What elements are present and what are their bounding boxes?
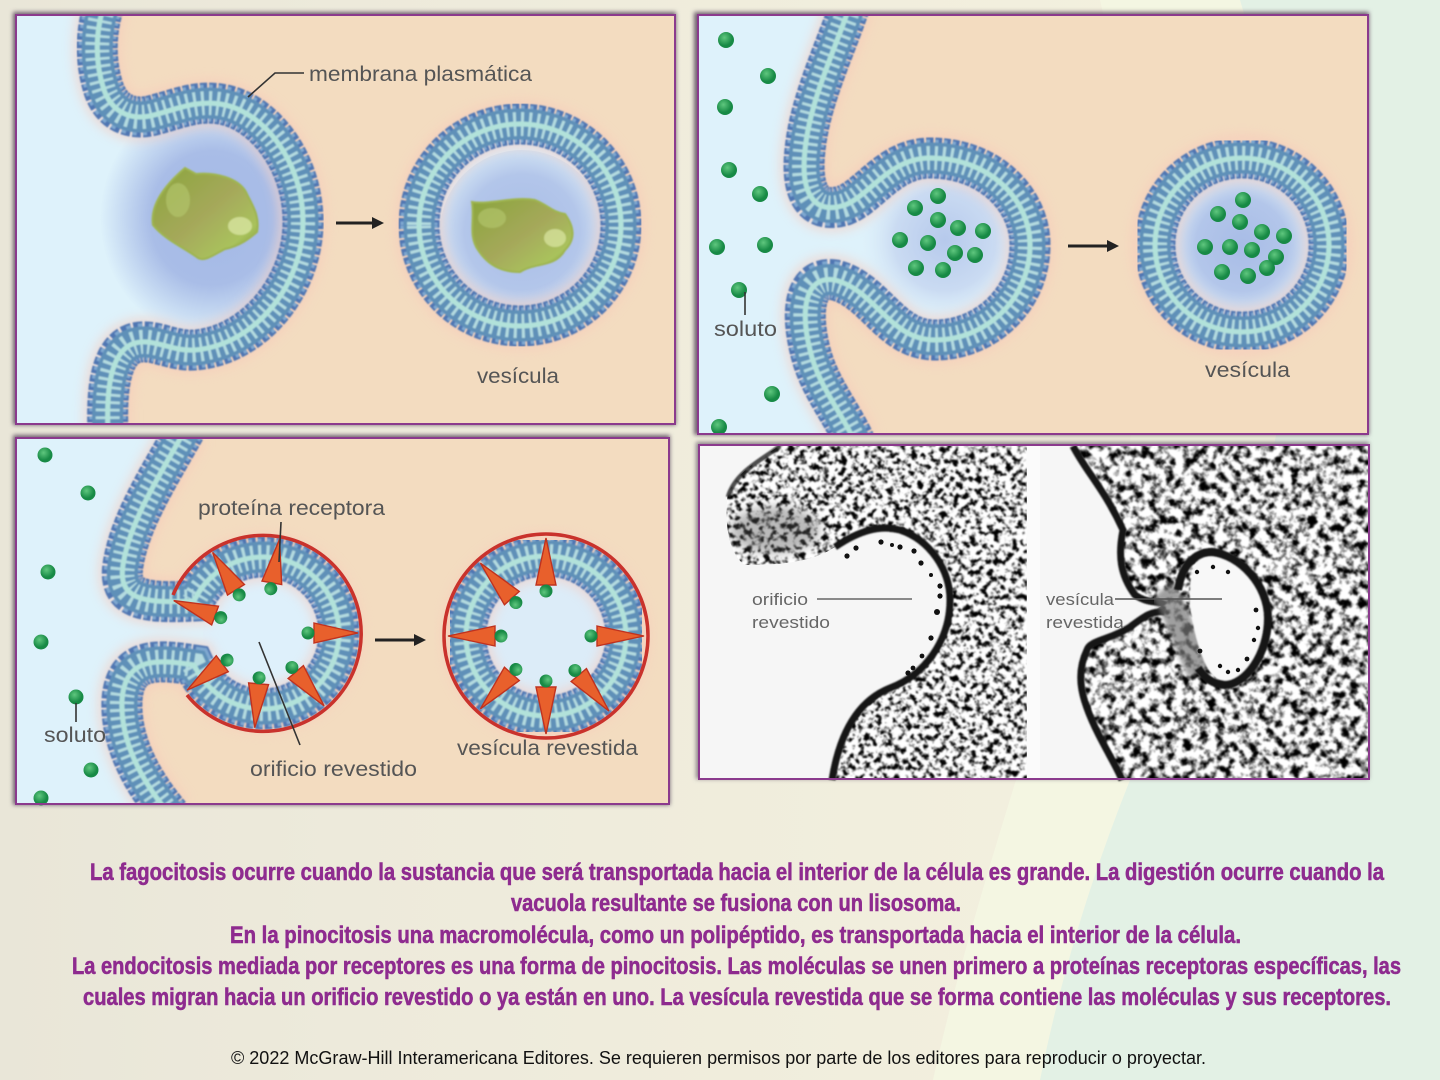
label: vesícula revestida bbox=[1046, 590, 1222, 632]
explanatory text: vacuola resultante se fusiona con un lisosoma. bbox=[511, 890, 961, 917]
explanatory text: En la pinocitosis una macromolécula, como un polipéptido, es transportada hacia el interior de la célula. bbox=[230, 922, 1241, 949]
label: soluto: soluto bbox=[714, 318, 777, 341]
cell exterior and membrane bbox=[10, 5, 324, 432]
label: orificio revestido: orificio revestido bbox=[250, 758, 417, 781]
label: vesícula revestida: vesícula bbox=[1046, 590, 1115, 609]
explanatory text bbox=[72, 859, 1401, 1011]
particle bbox=[153, 168, 258, 259]
micrograph: coated pit bbox=[699, 445, 1027, 780]
arrow bbox=[1068, 240, 1119, 252]
panel: pinocitosis bbox=[690, 5, 1369, 442]
receptor proteins on coated pit bbox=[170, 538, 358, 729]
label: membrana plasmática: membrana plasmática bbox=[309, 63, 532, 86]
label: vesícula revestida: revestida bbox=[1046, 613, 1125, 632]
arrow bbox=[375, 634, 426, 646]
panel: fagocitosis bbox=[10, 5, 676, 432]
label: soluto: soluto bbox=[44, 724, 106, 747]
cell exterior and coated pit membrane bbox=[10, 430, 361, 815]
label: proteína receptora: proteína receptora bbox=[198, 497, 385, 520]
cell exterior and membrane bbox=[690, 5, 1030, 442]
label: orificio revestido bbox=[250, 642, 417, 781]
solute molecules bbox=[34, 448, 98, 806]
copyright note: © 2022 McGraw-Hill Interamericana Editores. Se requieren permisos por parte de los editores para reproducir o proyectar. bbox=[231, 1047, 1206, 1068]
label: vesícula: vesícula bbox=[1205, 359, 1290, 382]
label: membrana plasmática bbox=[248, 63, 532, 97]
panel: micrographs bbox=[696, 442, 1369, 780]
label: vesícula revestida: vesícula revestida bbox=[457, 737, 638, 760]
coated vesicle bbox=[444, 534, 648, 738]
label: soluto bbox=[44, 703, 106, 747]
arrow bbox=[336, 217, 384, 229]
panel: endocitosis mediada por receptores bbox=[10, 430, 670, 815]
label: orificio revestido bbox=[752, 590, 912, 632]
label: orificio revestido: revestido bbox=[752, 613, 830, 632]
solute molecules bbox=[709, 32, 991, 435]
vesicle bbox=[418, 123, 622, 327]
label: soluto bbox=[714, 292, 777, 341]
vesicle bbox=[1154, 157, 1330, 333]
micrograph: coated vesicle bbox=[1040, 445, 1369, 780]
label: orificio revestido: orificio bbox=[752, 590, 808, 609]
label: vesícula: vesícula bbox=[477, 365, 559, 388]
